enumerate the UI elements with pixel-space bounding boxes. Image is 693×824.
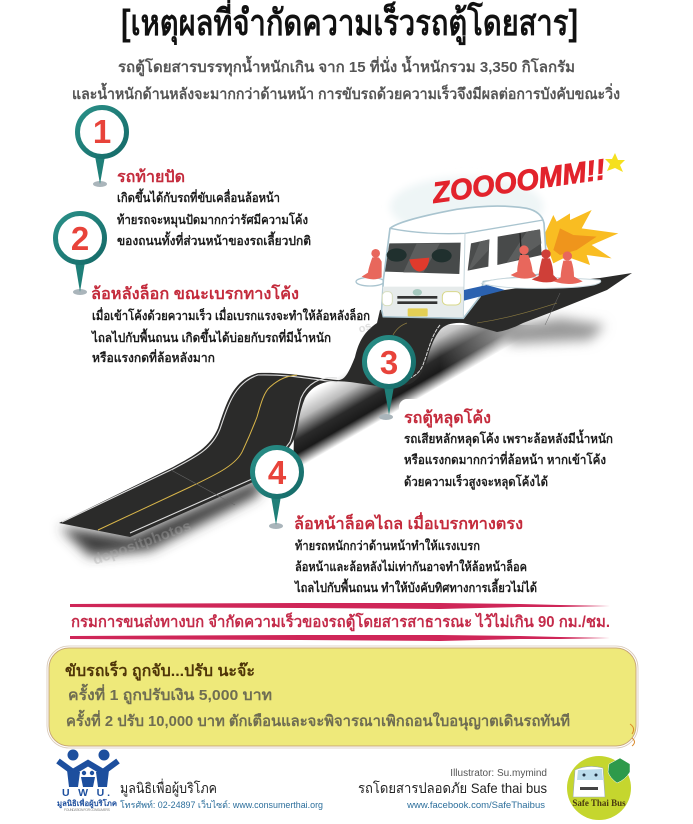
credits: www.facebook.com/SafeThaibus — [406, 800, 545, 811]
fine panel — [47, 646, 638, 748]
cause 4 text: ล้อหน้าและล้อหลังไม่เท่ากันอาจทำให้ล้อหน้าล็อค — [295, 559, 527, 574]
credits: Illustrator: Su.mymind — [450, 768, 547, 779]
intro text — [72, 55, 620, 103]
icon: star — [605, 153, 625, 172]
pin 4: 4 — [268, 454, 287, 491]
pin 3: 3 — [380, 344, 398, 381]
logo: foundation: U W U. — [62, 787, 110, 799]
cause 4 text: ไถลไปกับพื้นถนน ทำให้บังคับทิศทางการเลี้ยวไม่ได้ — [293, 578, 537, 595]
cause 2 text: ล้อหลังล็อก ขณะเบรกทางโค้ง — [91, 282, 299, 303]
fine panel: ครั้งที่ 2 ปรับ 10,000 บาท ตักเตือนและจะพิจารณาเพิกถอนใบอนุญาตเดินรถทันที — [66, 709, 570, 731]
intro text: และน้ำหนักด้านหลังจะมากกว่าด้านหน้า การขับรถด้วยความเร็วจึงมีผลต่อการบังคับขณะวิ่ง — [72, 82, 620, 103]
cause 1 text: ท้ายรถจะหมุนปัดมากกว่ารัศมีความโค้ง — [117, 212, 308, 228]
cause 2 text — [90, 282, 370, 365]
credits — [358, 768, 547, 811]
cause 1 text — [117, 168, 311, 248]
pin 1: 1 — [93, 113, 111, 150]
fine panel: ขับรถเร็ว ถูกจับ...ปรับ นะจ๊ะ — [65, 659, 255, 682]
speed limit banner — [70, 603, 610, 641]
logo: foundation: FOUNDATION FOR CONSUMERS — [64, 808, 111, 812]
watermark: depositphotos — [91, 517, 193, 569]
cause 1 text: ของถนนทั้งที่ส่วนหน้าของรถเลี้ยวปกติ — [117, 231, 311, 248]
road illustration — [59, 273, 632, 556]
badge: safe thai bus — [567, 756, 631, 820]
foundation text: มูลนิธิเพื่อผู้บริโภค — [120, 779, 217, 797]
cause 3 text — [399, 399, 613, 490]
cause 3 text: รถตู้หลุดโค้ง — [404, 407, 491, 429]
fine panel: ครั้งที่ 1 ถูกปรับเงิน 5,000 บาท — [68, 683, 272, 705]
cause 2 text: เมื่อเข้าโค้งด้วยความเร็ว เมื่อเบรกแรงจะทำให้ล้อหลังล็อก — [92, 307, 370, 323]
pin 3 — [364, 338, 414, 420]
cause 4 text: ล้อหน้าล็อคไถล เมื่อเบรกทางตรง — [294, 512, 523, 533]
credits: รถโดยสารปลอดภัย Safe thai bus — [358, 780, 547, 796]
logo: foundation: มูลนิธิเพื่อผู้บริโภค — [57, 797, 117, 809]
passengers right plate — [482, 245, 601, 288]
pin 2: 2 — [71, 220, 89, 257]
cause 3 text: รถเสียหลักหลุดโค้ง เพราะล้อหลังมีน้ำหนัก — [404, 429, 613, 447]
cause 2 text: ไถลไปกับพื้นถนน เกิดขึ้นได้บ่อยกับรถที่มีน้ำหนัก — [90, 328, 331, 345]
bus body — [382, 206, 547, 318]
cause 3 text: ด้วยความเร็วสูงจะหลุดโค้งได้ — [404, 474, 548, 490]
intro text: รถตู้โดยสารบรรทุกน้ำหนักเกิน จาก 15 ที่นั่ง น้ำหนักรวม 3,350 กิโลกรัม — [118, 55, 575, 77]
foundation text: โทรศัพท์: 02-24897 เว็บไซต์: www.consumerthai.org — [120, 798, 323, 810]
pin 4 — [252, 448, 302, 529]
foundation text — [120, 779, 323, 810]
pin 1 — [78, 108, 126, 187]
cause 1 text: เกิดขึ้นได้กับรถที่ขับเคลื่อนล้อหน้า — [117, 188, 280, 205]
watermark — [91, 320, 373, 569]
watermark: os — [357, 320, 373, 336]
bus illustration — [356, 177, 618, 318]
explosion — [543, 210, 618, 265]
cause 2 text: หรือแรงกดที่ล้อหลังมาก — [92, 349, 215, 365]
cause 4 text: ท้ายรถหนักกว่าด้านหน้าทำให้แรงเบรก — [295, 538, 480, 553]
passenger left plate — [356, 249, 384, 286]
zoom lettering: ZOOOOMM!! — [430, 154, 608, 210]
title: [เหตุผลที่จำกัดความเร็วรถตู้โดยสาร] — [121, 0, 578, 46]
badge: safe thai bus: Safe Thai Bus — [572, 798, 626, 808]
pin 2 — [56, 214, 104, 295]
cause 4 text — [293, 512, 537, 595]
cause 3 text: หรือแรงกดมากกว่าที่ล้อหน้า หากเข้าโค้ง — [404, 451, 606, 467]
logo: foundation — [57, 750, 118, 812]
cause 1 text: รถท้ายปัด — [117, 168, 185, 186]
speed limit banner: กรมการขนส่งทางบก จำกัดความเร็วของรถตู้โดยสารสาธารณะ ไว้ไม่เกิน 90 กม./ชม. — [71, 611, 610, 633]
